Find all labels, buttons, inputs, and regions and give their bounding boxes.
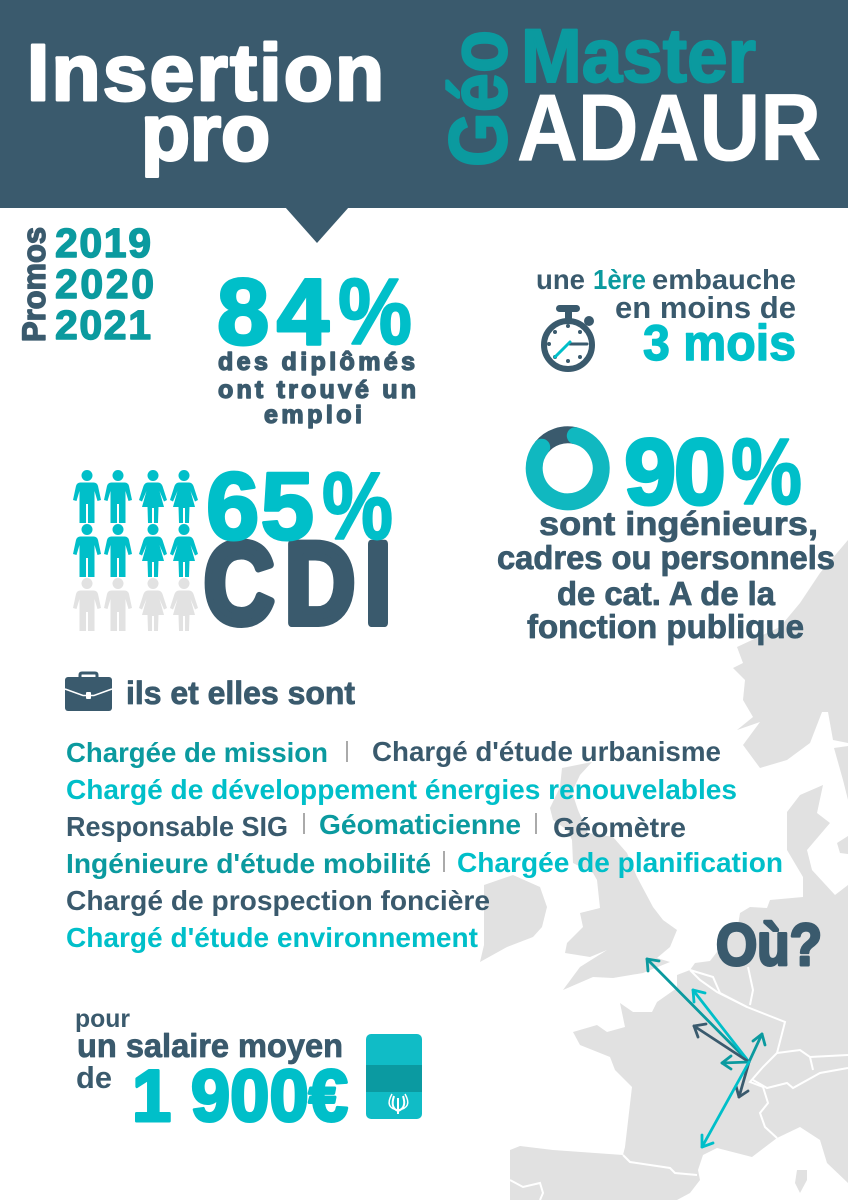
salary text: pour <box>75 1005 130 1033</box>
job list <box>66 736 783 953</box>
heading text: embauche <box>652 264 796 295</box>
figure and caption: 90 <box>624 419 726 524</box>
icon: briefcase <box>65 673 112 711</box>
65% figure: % <box>322 453 393 560</box>
figure and caption: fonction publique <box>527 608 804 645</box>
heading: ils et elles sont <box>126 675 355 711</box>
icon: banknote card <box>366 1034 422 1119</box>
CDI label: C <box>204 520 274 648</box>
stat: 65% CDI <box>73 453 393 648</box>
salary text: 1 900€ <box>132 1056 348 1137</box>
job list: Chargé d'étude urbanisme <box>372 736 721 767</box>
icon: stopwatch <box>544 305 594 369</box>
job list: Chargé d'étude environnement <box>66 922 478 953</box>
donut chart <box>534 435 601 502</box>
title: Insertion pro: Insertion <box>27 28 384 117</box>
heading text: une <box>536 264 585 295</box>
job list: Chargée de mission <box>66 737 328 768</box>
promos years: 2020 <box>55 261 154 307</box>
stat: 84% employed <box>217 259 416 429</box>
logo: Géo Master ADAUR: Géo <box>433 30 524 167</box>
65% figure <box>206 453 393 560</box>
promos years: 2021 <box>55 302 151 348</box>
65% figure: 65 <box>206 453 314 560</box>
heading: Où?: Où? <box>716 912 822 978</box>
heading text: 3 mois <box>643 315 796 371</box>
caption: ont trouvé un <box>218 376 416 404</box>
job list: Chargé de prospection foncière <box>66 885 490 916</box>
logo: Géo Master ADAUR: Master <box>521 14 756 99</box>
salary <box>75 1005 422 1137</box>
title: Insertion pro: pro <box>141 88 270 177</box>
CDI label: I <box>365 520 391 648</box>
heading text <box>536 264 796 371</box>
job list: Ingénieure d'étude mobilité <box>66 848 431 879</box>
salary text <box>75 1005 348 1137</box>
promos years: Promos <box>16 227 52 342</box>
title: Insertion pro <box>27 28 384 177</box>
job list: Géomètre <box>553 812 686 843</box>
CDI label: D <box>285 520 355 648</box>
caption: des diplômés <box>218 348 415 376</box>
promos years <box>16 220 154 348</box>
people pictogram <box>73 470 198 631</box>
heading text: en moins de <box>615 290 796 325</box>
figure 84%: % <box>338 259 412 364</box>
arrows on map <box>647 959 765 1147</box>
stat: 90% engineers <box>497 419 835 645</box>
salary text: un salaire moyen <box>77 1027 343 1064</box>
CDI label <box>204 520 391 648</box>
figure and caption: % <box>731 419 802 524</box>
figure 84%: 84 <box>217 259 329 364</box>
promos years: 2019 <box>55 220 151 266</box>
figure and caption: cadres ou personnels <box>497 539 835 576</box>
job list: Chargé de développement énergies renouvelables <box>66 774 737 805</box>
header banner <box>0 0 848 243</box>
figure 84% <box>217 259 412 364</box>
figure and caption <box>497 419 835 645</box>
jobs section <box>65 673 783 953</box>
caption: emploi <box>264 401 362 429</box>
logo: Géo Master ADAUR <box>433 14 821 181</box>
job list: Géomaticienne <box>319 809 521 840</box>
job list: Responsable SIG <box>66 811 288 842</box>
job list: Chargée de planification <box>457 847 783 878</box>
figure and caption: sont ingénieurs, <box>539 505 818 542</box>
stat: first job in 3 months <box>536 264 796 371</box>
heading text: 1ère <box>593 264 646 295</box>
background map of Europe <box>480 540 848 1200</box>
salary text: de <box>76 1060 112 1095</box>
figure and caption: de cat. A de la <box>557 575 776 612</box>
caption <box>218 348 416 429</box>
